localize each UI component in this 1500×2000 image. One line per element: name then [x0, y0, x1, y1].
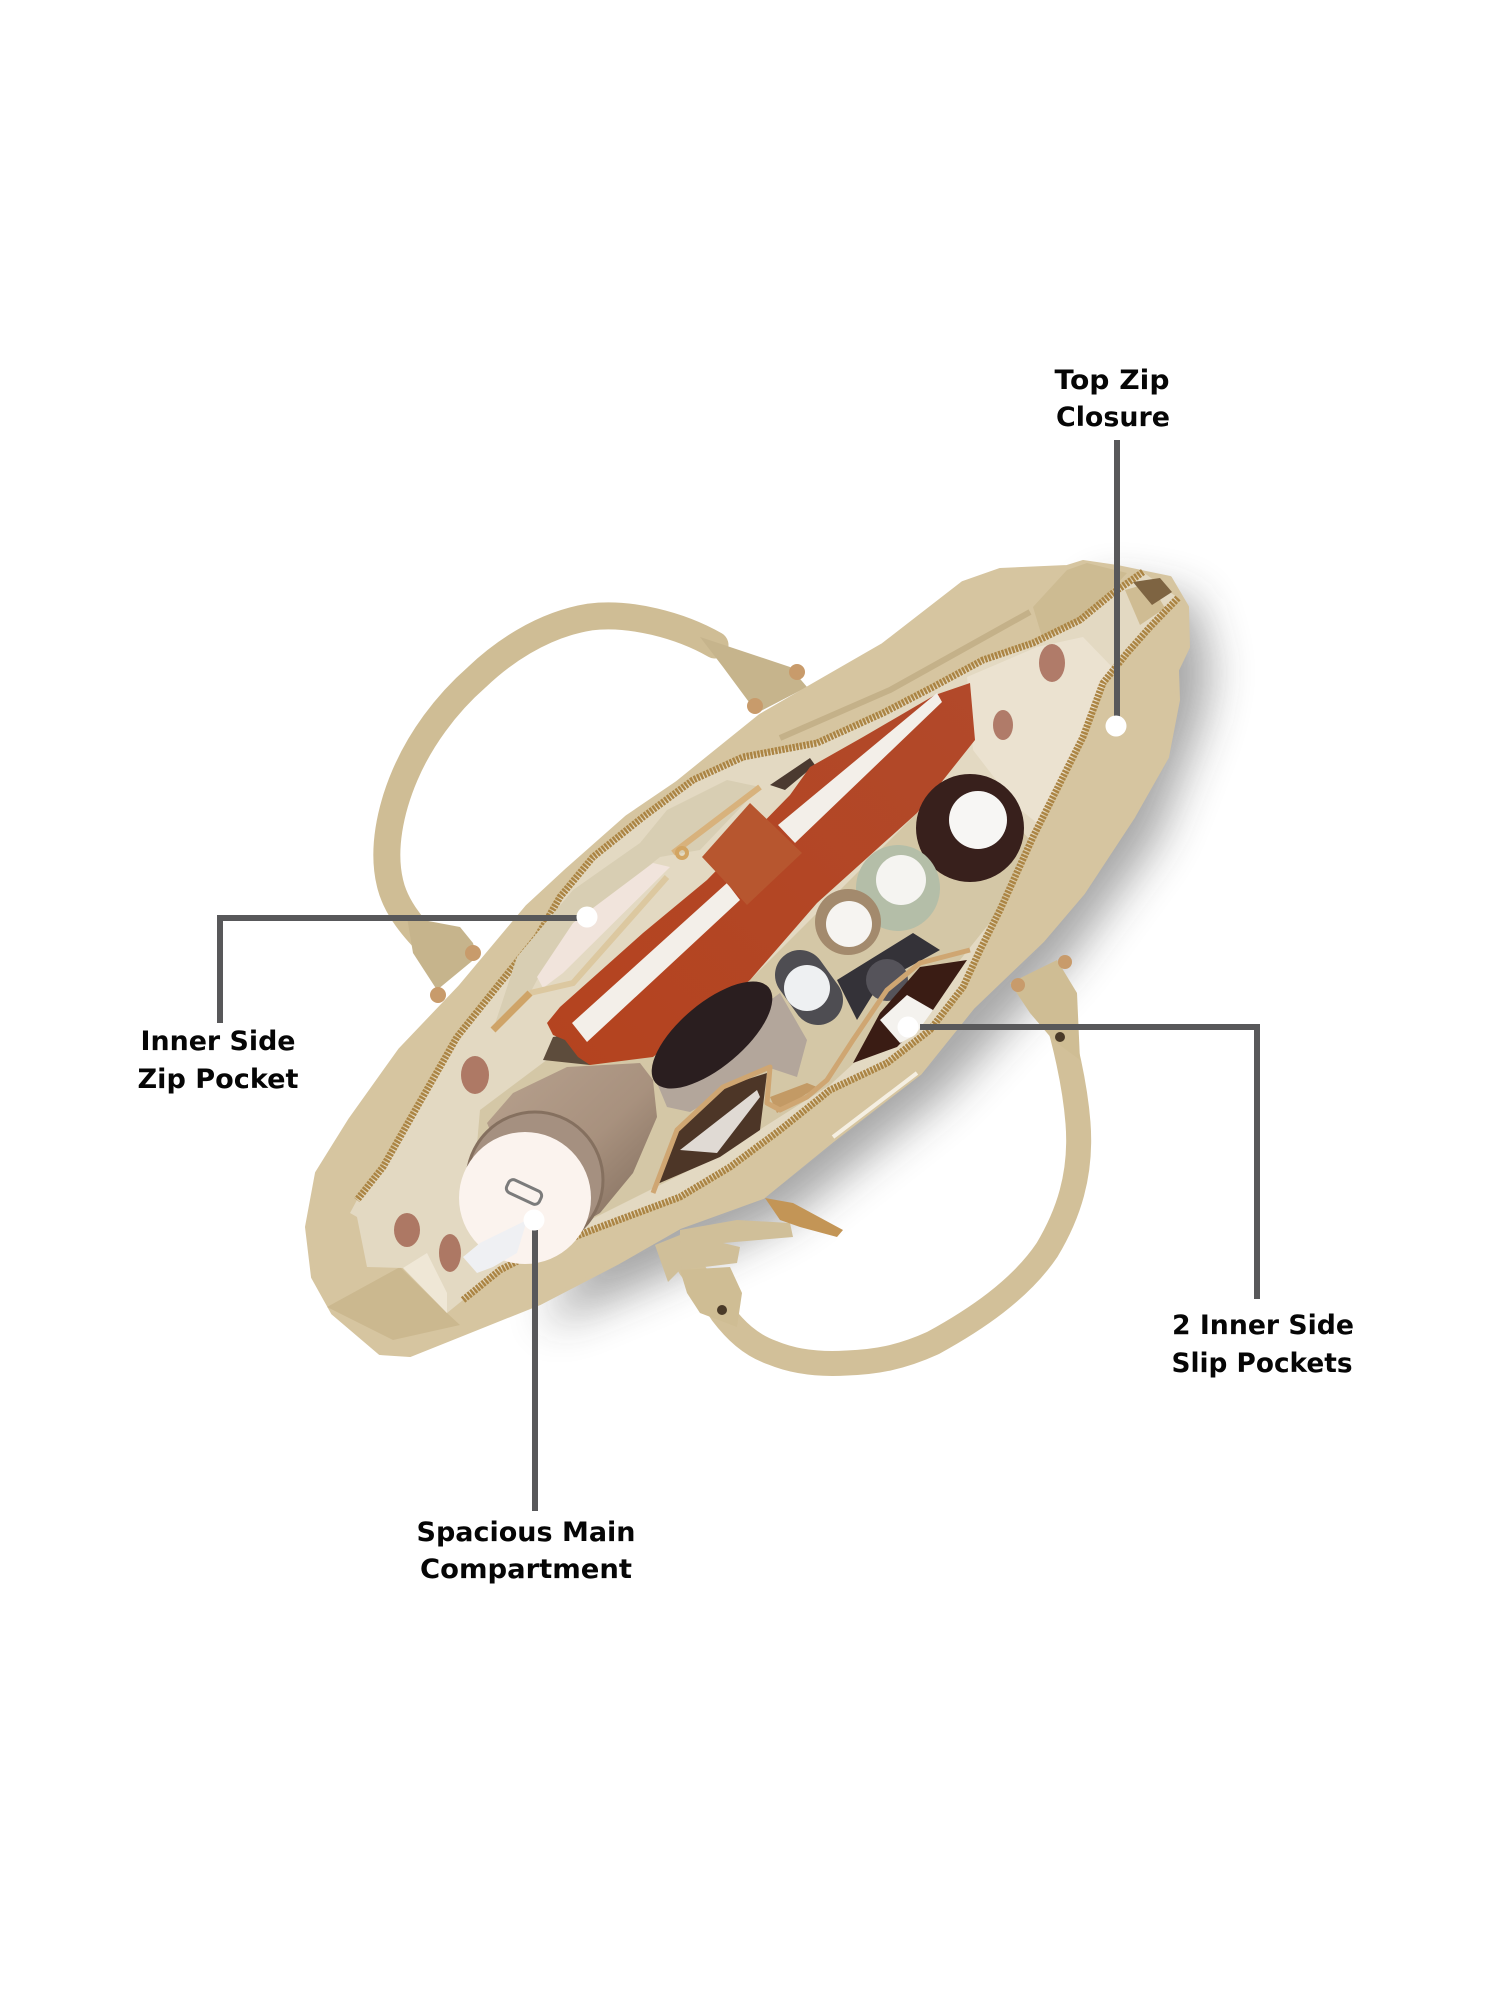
bottle body [487, 1063, 657, 1223]
leader line [220, 918, 578, 1023]
marker dot [576, 906, 598, 928]
callout: top zip closure: Closure [1056, 402, 1170, 433]
handle: lower right [690, 1000, 1079, 1363]
lower zip chain [463, 598, 1178, 1300]
base gusset [327, 1267, 460, 1340]
grey tube [784, 965, 830, 1011]
white edge strip [833, 1073, 917, 1137]
leader line [1114, 440, 1120, 718]
pocket gold trim [673, 787, 760, 853]
label: 2 Inner Side [1172, 1310, 1354, 1341]
label: Top Zip [1054, 365, 1170, 396]
upper zip chain [357, 572, 1143, 1200]
white item in pocket [880, 995, 933, 1043]
dark gap below notebook [543, 1033, 590, 1065]
marker dot [898, 1016, 918, 1038]
notebook strap [702, 803, 802, 905]
amber bottle [815, 889, 881, 955]
bottle ring [467, 1112, 603, 1248]
slip pocket dark interior [853, 960, 967, 1063]
round tin [635, 963, 807, 1112]
upper right lining folds [967, 637, 1112, 823]
callout: top zip closure [1054, 365, 1170, 736]
marker dot [524, 1210, 544, 1230]
handle tabs: lower right top [1010, 955, 1080, 1060]
callout: 2 inner side slip pockets: Slip Pockets [1172, 1348, 1352, 1379]
dark bottle [916, 774, 1024, 882]
notebook cover [547, 683, 975, 1065]
side slip pockets [653, 950, 970, 1193]
marker dot [1106, 716, 1126, 736]
textured top flap [1033, 563, 1127, 640]
bag body [307, 562, 1188, 1355]
top rim shading [780, 612, 1030, 738]
handle tabs: lower left [655, 1220, 793, 1327]
notebook pages lower [572, 883, 740, 1042]
makeup compact [837, 933, 940, 1020]
mirror [680, 1090, 760, 1153]
bag interior lining [350, 572, 1178, 1313]
compartment floor [470, 780, 1030, 1245]
bottle cap [459, 1132, 591, 1264]
phone [537, 863, 670, 988]
water bottle [459, 1063, 657, 1273]
pocket gold edge [653, 950, 970, 1193]
pocket lower trim [493, 848, 687, 1030]
cap latch [505, 1178, 543, 1206]
top zip loop [1125, 578, 1172, 625]
lining monograms [394, 644, 1065, 1272]
label: Inner Side [140, 1026, 296, 1057]
white tag [463, 1220, 527, 1273]
side zip pocket [493, 780, 760, 1030]
callout: inner side zip pocket [138, 906, 598, 1095]
callout: spacious main compartment: Compartment [420, 1554, 632, 1585]
callout: inner side zip pocket: Zip Pocket [138, 1064, 299, 1095]
bag drop shadow [544, 584, 1212, 1327]
notebook pages upper [778, 693, 942, 843]
dark gap behind notebook [770, 758, 815, 790]
callout: spacious main compartment [416, 1210, 636, 1585]
lining fold bottom left [403, 1253, 447, 1313]
notebook [547, 683, 975, 1065]
callout: 2 inner side slip pockets [898, 1016, 1354, 1379]
handbag illustration [307, 562, 1212, 1363]
leader line [920, 1027, 1257, 1299]
pocket panel [493, 780, 760, 1030]
label: Spacious Main [416, 1517, 636, 1548]
tan cloth [770, 1083, 817, 1113]
glass bottle [856, 845, 940, 931]
handle: upper left [387, 616, 807, 1003]
lower pocket dark contents [655, 1073, 767, 1185]
buckle charm [765, 1198, 843, 1237]
leader line [532, 1230, 538, 1511]
